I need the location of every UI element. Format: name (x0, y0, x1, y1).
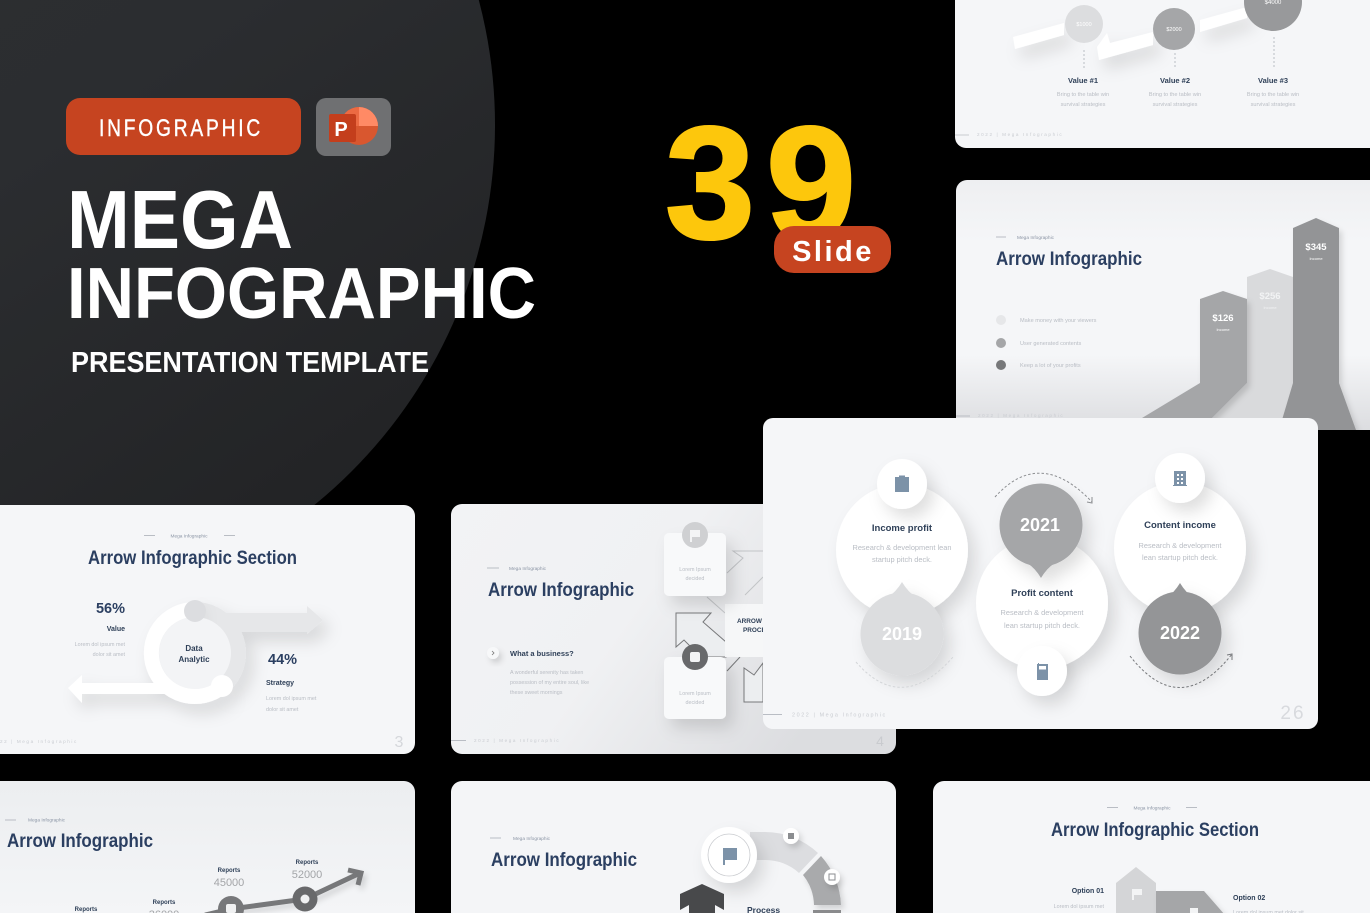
chevron bullet (487, 647, 499, 659)
eyebrow (1107, 806, 1197, 812)
eyebrow (144, 534, 235, 538)
ring segment mid (803, 856, 841, 905)
page number: 26 (1280, 703, 1306, 724)
business text (510, 649, 589, 696)
white arrow (68, 609, 222, 703)
year drop 2019 (860, 582, 944, 676)
slide background (0, 781, 415, 913)
label 52000: 52000 (292, 869, 322, 881)
option 02 text (1233, 895, 1304, 913)
bullet list (996, 315, 1097, 370)
white arrow bars (1013, 7, 1247, 60)
stat 56%: 56% (96, 601, 125, 617)
dashed connectors (1084, 37, 1274, 68)
eyebrow: Mega Infographic (170, 534, 208, 540)
value 2 text: survival strategies (1153, 102, 1198, 108)
label 36000: Reports (153, 900, 176, 906)
footer: 2022 | Mega Infographic (792, 712, 887, 718)
big number 39 (665, 93, 856, 272)
value 1 text: Value #1 (1068, 76, 1098, 85)
value circle 3: $4000 (1265, 0, 1282, 6)
outlined arrows (676, 551, 763, 702)
icon: phone (1017, 646, 1067, 696)
eyebrow: Mega Infographic (28, 818, 66, 824)
option 01 text: Lorem dol ipsum met (1054, 904, 1104, 910)
text content income: lean startup pitch deck. (1142, 553, 1218, 562)
value 3 text: survival strategies (1251, 102, 1296, 108)
label 52000 (292, 860, 322, 881)
dashed arc 2019 (856, 657, 953, 687)
ring cap gray (184, 600, 203, 622)
centre box (725, 604, 785, 657)
heading: Arrow Infographic (488, 580, 634, 601)
subtitle: PRESENTATION TEMPLATE (71, 347, 429, 379)
text income profit: Research & development lean (852, 543, 952, 552)
bubble content income (1114, 482, 1246, 614)
slide background (451, 781, 896, 913)
value 3 text: Bring to the table win (1247, 92, 1299, 98)
icon: clipboard (877, 459, 927, 509)
value 2 text: Bring to the table win (1149, 92, 1201, 98)
centre label: Data (185, 644, 203, 653)
text content income: Content income (1144, 520, 1216, 531)
footer: 2022 | Mega Infographic (474, 738, 560, 743)
card bottom: decided (686, 700, 704, 706)
icon: building (1155, 453, 1205, 503)
centre label: Analytic (178, 655, 210, 664)
business text: What a business? (510, 649, 574, 658)
option 1 pentagon (1116, 867, 1156, 913)
year drop 2022: 2022 (1160, 623, 1200, 643)
ring segment dark (813, 910, 841, 913)
year drop 2021 (1000, 484, 1082, 578)
dashed arrow 2021 (995, 473, 1092, 503)
arrow $256: Income (1263, 305, 1277, 310)
value circle 1 (1065, 5, 1103, 43)
text profit content: Research & development (1000, 608, 1084, 617)
ring cap white (211, 675, 233, 697)
business text: possession of my entire soul, like (510, 680, 589, 686)
slide background (763, 418, 1318, 729)
centre box: ARROW (737, 618, 763, 625)
bullet list: User generated contents (1020, 341, 1081, 347)
badge: infographic (66, 98, 301, 155)
page number: 4 (876, 733, 884, 749)
icon: small page (824, 869, 840, 885)
value circle 1: $1000 (1076, 22, 1092, 28)
label 45000: Reports (218, 868, 241, 874)
stat 44%: dolor sit amet (266, 707, 299, 713)
panel: slide arrow bars (956, 180, 1370, 430)
heading: Arrow Infographic (996, 249, 1142, 270)
value 3 text (1247, 76, 1299, 108)
panel: slide value chart top right (955, 0, 1370, 148)
option 02 text: Option 02 (1233, 895, 1265, 902)
heading: Arrow Infographic (491, 850, 637, 871)
arrow $256 (1218, 269, 1293, 418)
slide background (956, 180, 1370, 430)
value 2 text: Value #2 (1160, 76, 1190, 85)
card bottom (664, 644, 726, 719)
panel: slide data analytic (0, 505, 415, 754)
label reports left: Reports (75, 907, 98, 913)
text content income: Research & development (1138, 541, 1222, 550)
label 45000 (214, 868, 244, 889)
panel: slide arrow process (451, 504, 896, 754)
card top: Lorem Ipsum (679, 567, 711, 573)
heading: Arrow Infographic (7, 831, 153, 852)
label 52000: Reports (296, 860, 319, 866)
slide background (933, 781, 1370, 913)
stat 56% (75, 601, 125, 658)
stat 44% (266, 652, 317, 713)
text income profit: Income profit (872, 523, 933, 534)
eyebrow (996, 236, 1054, 240)
centre label (178, 644, 210, 664)
heading: Arrow Infographic Section (88, 548, 297, 569)
slide background (451, 504, 896, 754)
arrow $126 (1142, 291, 1247, 418)
year drop 2021: 2021 (1020, 515, 1060, 535)
footer: 2022 | Mega Infographic (978, 413, 1064, 418)
card top: decided (686, 576, 704, 582)
title: mega: MEGA (67, 173, 293, 266)
panel: slide reports (0, 781, 415, 913)
value 1 text: survival strategies (1061, 102, 1106, 108)
value 1 text: Bring to the table win (1057, 92, 1109, 98)
stat 56%: dolor sit amet (93, 652, 125, 658)
centre box: PROCESS (743, 627, 775, 634)
ring segment light (750, 832, 818, 873)
heading: Arrow Infographic Section (1051, 820, 1259, 841)
arrow $345: Income (1309, 256, 1323, 261)
card bottom: Lorem Ipsum (679, 691, 711, 697)
stat 44%: 44% (268, 652, 297, 668)
year drop 2019: 2019 (882, 624, 922, 644)
business text: A wonderful serenity has taken (510, 670, 583, 676)
arrow $345: $345 (1305, 242, 1327, 253)
dark circle backdrop (0, 0, 495, 615)
eyebrow (487, 566, 546, 571)
option 2 arrow (1156, 891, 1225, 913)
arrow $256: $256 (1259, 291, 1281, 302)
card top (664, 522, 726, 596)
node 45000 (218, 896, 244, 913)
option 01 text (1054, 888, 1104, 910)
node 52000 (292, 886, 318, 912)
eyebrow: Mega Infographic (513, 836, 551, 842)
eyebrow: Mega Infographic (1133, 806, 1171, 812)
value circle 2 (1153, 8, 1195, 50)
ring centre (159, 617, 231, 689)
gray arrow (195, 606, 323, 687)
panel: slide options (933, 781, 1370, 913)
eyebrow (490, 836, 551, 842)
value circle 2: $2000 (1166, 27, 1182, 33)
panel: slide timeline main (763, 418, 1318, 729)
option 01 text: Option 01 (1072, 888, 1104, 895)
stat 56%: Value (107, 626, 125, 633)
big number 39: 9 (766, 93, 856, 272)
dashed arrow 2022 (1130, 654, 1232, 688)
badge: slide: Slide (792, 236, 874, 268)
value 3 text: Value #3 (1258, 76, 1288, 85)
growth arrow line (205, 870, 361, 913)
stat 56%: Lorem dol ipsum met (75, 642, 125, 648)
label 36000 (149, 900, 179, 913)
bullet list: Make money with your viewers (1020, 318, 1097, 324)
value 2 text (1149, 76, 1201, 108)
text content income (1138, 520, 1222, 562)
footer: 2022 | Mega Infographic (977, 132, 1063, 137)
panel: slide process (451, 781, 896, 913)
icon: powerpoint: P (334, 119, 348, 141)
text profit content: Profit content (1011, 588, 1074, 599)
big number 39: 3 (665, 93, 755, 272)
business text: these sweet mornings (510, 690, 563, 696)
stat 44%: Lorem dol ipsum met (266, 696, 317, 702)
year drop 2022 (1138, 583, 1222, 674)
arrow $345 (1279, 218, 1356, 430)
text profit content (1000, 588, 1084, 630)
badge: slide (774, 226, 891, 273)
arrow $126: $126 (1212, 313, 1234, 324)
page number: 3 (395, 734, 404, 751)
slide background (955, 0, 1370, 148)
text income profit: startup pitch deck. (872, 555, 932, 564)
value circle 3 (1244, 0, 1302, 31)
eyebrow: Mega Infographic (509, 566, 547, 572)
badge: infographic: INFOGRAPHIC (99, 114, 263, 142)
value 1 text (1057, 76, 1109, 108)
slide background (0, 505, 415, 754)
bullet list: Keep a lot of your profits (1020, 363, 1081, 369)
stat 44%: Strategy (266, 680, 294, 687)
bubble income profit (836, 484, 968, 616)
footer: 22 | Mega Infographic (0, 739, 78, 744)
bubble profit content (976, 537, 1108, 669)
title: infographic: INFOGRAPHIC (67, 254, 536, 334)
eyebrow: Mega Infographic (1017, 235, 1055, 241)
eyebrow (5, 818, 66, 824)
label 45000: 45000 (214, 877, 244, 889)
icon: powerpoint (316, 98, 391, 156)
icon: flag circle (701, 827, 757, 883)
text income profit (852, 523, 952, 564)
dark up arrow (680, 884, 724, 913)
icon: small square (783, 828, 799, 844)
text profit content: lean startup pitch deck. (1004, 621, 1080, 630)
arrow $126: Income (1216, 327, 1230, 332)
